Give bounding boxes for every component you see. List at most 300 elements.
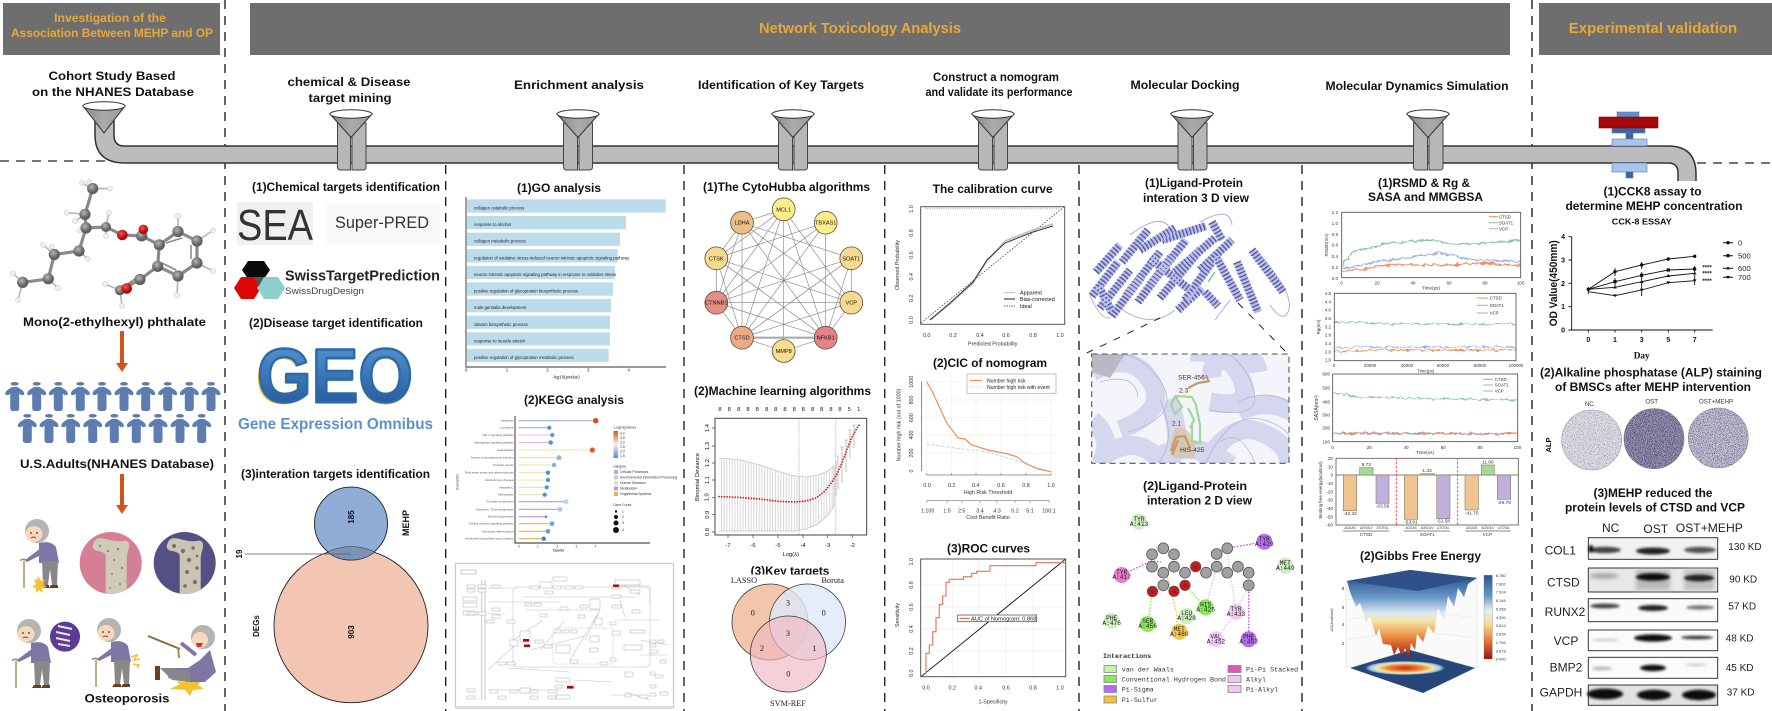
chart: MMGBSA binding free energy bars: ΔGSOLV (1360, 526, 1374, 530)
stage headings: and validate its performance (926, 85, 1073, 99)
chart: MMGBSA binding free energy bars: Binding free energy(kcal/mol) (1318, 461, 1323, 519)
heading: ALP: of BMSCs after MEHP intervention (1555, 380, 1751, 394)
logo: Super-PRED (327, 203, 440, 245)
chart: LASSO deviance plot: 8 (783, 407, 787, 413)
chart: Venn diagram of MEHP and DEGs (235, 487, 428, 703)
chart: calibration curve: 0.2 (949, 333, 957, 339)
chart: CCK-8 line chart: 5 (1666, 337, 1670, 344)
logo: SwissTargetPrediction (234, 261, 440, 299)
chart: SASA: SASA(nm²) (1314, 395, 1320, 421)
chart: clinical impact curve: High Risk Threshold (964, 490, 1012, 496)
chart: western blots (1540, 521, 1762, 705)
panel: molecular dynamics simulation (1314, 176, 1525, 693)
chart: RMSD: CTSD (1499, 214, 1511, 219)
blot: CTSD (1588, 568, 1718, 592)
chart: SASA (1314, 372, 1522, 455)
legend: interactions: Pi-Alkyl (1246, 686, 1278, 694)
chart: Rg: Rg(nm) (1316, 319, 1321, 334)
legend: KEGG: 3.5 (620, 436, 625, 440)
image: docking close-up: 2.1 (1172, 420, 1181, 428)
legend: interactions: Conventional Hydrogen Bond (1122, 676, 1226, 684)
chart: Rg: 2.4 (1325, 341, 1332, 346)
chart: calibration curve: 0.0 (923, 333, 930, 339)
chart: Gibbs free-energy landscape: ΔG(kcal/mol) (1329, 608, 1334, 633)
chart: clinical impact curve: 1.0 (1047, 483, 1055, 489)
chart: clinical impact curve: 800 (909, 396, 915, 404)
chart: GO bars: positive regulation of glycoprotein metabolic process (474, 355, 574, 360)
chart: three-way Venn: 0 (822, 608, 826, 618)
chart: calibration curve: Observed Probability (895, 240, 901, 290)
chart: ROC curve: 0.6 (909, 603, 915, 611)
chart: PPI network: MCL1 (776, 207, 791, 213)
chart: calibration curve: Apparent (1020, 290, 1042, 296)
heading: ALP: (2)Alkaline phosphatase (ALP) staining (1540, 366, 1762, 380)
chart: 2D interaction diagram: A:480 (1170, 631, 1189, 638)
chart: KEGG lollipop: Pyruvate metabolism (486, 500, 514, 504)
chart: CCK-8 line chart (1548, 216, 1751, 362)
panel: cohort study (5, 180, 221, 706)
label: US adults: U.S.Adults(NHANES Database) (20, 457, 214, 471)
chart: LASSO deviance plot: Log(λ) (782, 552, 799, 558)
chart: 2D interaction diagram: A:428 (1177, 615, 1196, 622)
chart: Rg: 60000 (1437, 363, 1450, 368)
chart: KEGG lollipop: Toll-like receptor signaling pathway (469, 522, 514, 526)
chart: Gibbs free-energy landscape: 4 (1342, 622, 1345, 627)
chart: RMSD: 0.0 (1332, 276, 1338, 281)
panel: nomogram validation (895, 182, 1066, 706)
header: network toxicology banner (250, 3, 1510, 55)
chart: SASA: CTSD (1495, 377, 1507, 382)
chart: Gibbs free-energy landscape: 0.000 (1496, 657, 1506, 662)
chart: CCK-8 line chart: 1 (1561, 304, 1565, 311)
header: network toxicology banner: Network Toxicology Analysis (759, 20, 961, 37)
chart: GO bars: collagen metabolic process (474, 239, 526, 244)
chart: MMGBSA binding free energy bars: ΔGGAS (1405, 526, 1417, 530)
chart: SASA: 0 (1331, 445, 1334, 450)
chart: MMGBSA binding free energy bars: 0 (1330, 473, 1333, 478)
chart: RMSD: 60 (1446, 280, 1452, 286)
image: ALP staining wells: OST+MEHP (1699, 398, 1733, 406)
chart: LASSO deviance plot: 1 (857, 407, 860, 413)
chart: western blots: CTSD (1547, 576, 1580, 590)
chart: KEGG lollipop: Lysosome (500, 426, 514, 430)
chart: KEGG lollipop: 3 (576, 544, 578, 548)
chart: MMGBSA binding free energy bars: ΔTOTAL (1376, 526, 1389, 530)
chart: PPI network: NFKB1 (817, 336, 835, 342)
chart: RMSD: SOAT1 (1499, 220, 1514, 225)
chart: western blots: 45 KD (1726, 663, 1753, 674)
chart: RMSD: 1.0 (1332, 221, 1338, 226)
chart: PPI network: TBXAS1 (815, 221, 836, 227)
chart: LASSO deviance plot: 8 (793, 407, 796, 413)
chart: CCK-8 line chart: Day (1634, 352, 1650, 362)
chart: GO bars: vitamin biosynthetic process (474, 322, 528, 327)
chart: clinical impact curve: 0.8 (1022, 483, 1030, 489)
legend: KEGG: 3 (622, 521, 624, 525)
chart: Rg (1316, 291, 1524, 374)
chart: RMSD: 20 (1374, 280, 1380, 286)
heading: RMSD Rg SASA: SASA and MMGBSA (1368, 190, 1483, 204)
heading: CCK8: determine MEHP concentration (1566, 199, 1742, 213)
chart: CCK-8 line chart: OD Value(450mm) (1548, 240, 1560, 326)
chart: RMSD: RSMD(nm) (1324, 233, 1329, 256)
chart: GO bars: neuron intrinsic apoptotic signaling pathway in response to oxidative stress (474, 272, 616, 277)
pipeline pipe (95, 120, 1696, 181)
chart: MMGBSA binding free energy bars: -60 (1326, 523, 1333, 528)
chart: CCK-8 line chart: **** (1702, 271, 1712, 277)
chart: calibration curve: 1.0 (909, 205, 915, 213)
image: ALP staining wells: NC (1585, 401, 1594, 408)
chart: MMGBSA binding free energy bars: ΔGSOLV (1481, 526, 1495, 530)
chart: ROC curve: 0.8 (1029, 686, 1037, 692)
chart: 2D interaction diagram: TYR (1116, 569, 1128, 576)
chart: 2D interaction diagram: PHE (1243, 634, 1255, 640)
logo: SwissTargetPrediction: SwissDrugDesign (285, 286, 364, 297)
chart: RMSD: 100 (1517, 280, 1525, 286)
chart: Rg: 4.4 (1325, 299, 1332, 304)
chart: LASSO deviance plot: 8 (820, 407, 823, 413)
heading: CCK8 (1566, 184, 1742, 213)
icon: osteoporotic bone (154, 532, 216, 598)
chart: GO bars: response to alcohol (474, 222, 511, 227)
chart: RMSD: 40 (1410, 280, 1416, 286)
chart: SASA: 80 (1477, 445, 1483, 450)
chart: three-way Venn: 3 (786, 629, 790, 638)
chart: calibration curve: 0.4 (909, 273, 915, 280)
stage headings: Identification of Key Targets (698, 78, 864, 92)
chart: 2D interaction diagram: TYR (1230, 606, 1242, 613)
chart: calibration curve: Predicted Probability (968, 342, 1018, 348)
chart: calibration curve: 0.6 (909, 251, 915, 259)
heading: ROC: (3)ROC curves (947, 542, 1030, 556)
chart: RMSD: 1.2 (1332, 210, 1338, 215)
valve: experimental clamp (1599, 112, 1658, 178)
logo: SEA: SEA (237, 201, 314, 250)
chart: three-way Venn: 1 (812, 644, 816, 653)
chart: MMGBSA binding free energy bars: 20 (1328, 456, 1333, 461)
legend: KEGG: 2.0 (620, 450, 625, 454)
legend: KEGG: Metabolism (620, 486, 638, 490)
heading: 3D view (1143, 176, 1250, 205)
chart: RMSD: 0.4 (1332, 254, 1338, 259)
chart: LASSO deviance plot: 8 (746, 407, 750, 413)
icon: healthy bone (80, 532, 142, 598)
chart: GO bars: 0 (465, 368, 468, 372)
logo: Super-PRED: Super-PRED (335, 213, 429, 232)
heading: Gibbs: (2)Gibbs Free Energy (1360, 549, 1481, 563)
chart: CCK-8 line chart: 3 (1561, 258, 1565, 264)
chart: RMSD: Time(ps) (1422, 286, 1440, 290)
arrow: to osteoporosis (116, 474, 128, 514)
chart: PPI network: SOAT1 (842, 256, 860, 262)
chart: 2D interaction diagram: O (1172, 589, 1176, 594)
chart: LASSO deviance plot: 1.4 (705, 423, 711, 432)
chart: SASA: Time(ns) (1416, 450, 1434, 455)
chart: SASA: 300 (1322, 413, 1330, 418)
chart: western blots: OST+MEHP (1676, 521, 1743, 535)
chart: PPI network: CTNNB1 (705, 301, 727, 307)
chart: 2D interaction diagram: VAL (1210, 634, 1222, 640)
chart: Rg: 1.6 (1325, 358, 1332, 363)
blot: BMP2 (1588, 657, 1718, 678)
chart: SASA: 500 (1322, 385, 1330, 390)
chart: SASA: VCP (1495, 389, 1504, 394)
chart: clinical impact curve: 1:5 (943, 508, 951, 514)
heading: ALP (1540, 366, 1762, 394)
chart: KEGG lollipop: Apoptosis (501, 419, 514, 423)
heading: chemical targets: (1)Chemical targets identification (252, 180, 440, 194)
chart: Rg: 20000 (1364, 363, 1377, 368)
chart: LASSO deviance plot: 8 (737, 407, 740, 413)
chart: Gibbs free-energy landscape: 7.024 (1496, 590, 1506, 595)
chart: clinical impact curve: 0.4 (972, 483, 979, 489)
chart: KEGG lollipop: Prostate cancer (493, 463, 514, 467)
chart: LASSO deviance plot: 1.2 (705, 459, 711, 467)
chart: ROC curve: 0.0 (922, 686, 930, 692)
chart: KEGG lollipop: Steroid biosynthesis (488, 515, 514, 519)
chart: ROC curve: 0.4 (975, 686, 982, 692)
chart: ROC curve: 0.0 (909, 670, 915, 677)
chart: clinical impact curve: 5:1 (1026, 508, 1034, 514)
chart: RMSD: 0 (1340, 280, 1343, 286)
chart: LASSO deviance plot: -4 (800, 543, 806, 549)
icon: falling elder (148, 625, 216, 696)
chart: three-way Venn (725, 574, 855, 708)
legend: interactions: Pi-Sulfur (1122, 697, 1158, 705)
chart: MMGBSA binding free energy bars: ΔGSOLV (1421, 526, 1434, 530)
chart: KEGG lollipop: Hepatitis C (499, 485, 514, 489)
chart: LASSO deviance plot: 8 (765, 407, 768, 413)
legend: KEGG: 4.0 (620, 432, 625, 436)
header: association study banner (3, 3, 220, 55)
chart: clinical impact curve: 400 (909, 430, 915, 440)
chart: LASSO deviance plot: -7 (725, 543, 731, 549)
chart: GO bars: 3 (587, 368, 590, 372)
chart: CCK-8 line chart: 2 (1561, 281, 1565, 288)
chart: ROC curve: 0.2 (909, 647, 915, 655)
legend: KEGG: 1.5 (620, 454, 625, 458)
heading: 3D view: (1)Ligand-Protein (1145, 176, 1243, 190)
chart: LASSO deviance plot: 5 (848, 407, 851, 413)
chart: 2D interaction diagram: A:453 (1239, 638, 1258, 646)
logo: GEO: GEO (257, 334, 413, 419)
chart: Rg: 3.6 (1325, 316, 1332, 321)
chart: 2D interaction diagram: A:452 (1207, 638, 1226, 646)
chart: western blots: OST (1643, 522, 1669, 536)
legend: interactions: Pi-Pi Stacked (1246, 666, 1298, 674)
chart: LASSO deviance plot: 8 (756, 407, 759, 413)
chart: three-way Venn: LASSO (731, 576, 757, 585)
chart: MMGBSA binding free energy bars: CTSD (1360, 532, 1373, 537)
label: osteoporosis: Osteoporosis (84, 692, 170, 706)
chart: RMSD: 0.8 (1332, 232, 1338, 237)
chart: CCK-8 line chart: **** (1702, 266, 1712, 272)
chart: MMGBSA binding free energy bars: -51.58 (1436, 518, 1450, 524)
chart: calibration curve: 1.0 (1056, 333, 1064, 339)
chart: GO bars: 1 (506, 368, 509, 372)
chart: LASSO deviance plot: 1.3 (705, 442, 711, 450)
legend: KEGG: category (613, 464, 626, 468)
chart: Rg: CTSD (1490, 296, 1502, 301)
chart: clinical impact curve: 2:5 (958, 508, 965, 514)
logo: SwissTargetPrediction: SwissTargetPrediction (285, 268, 440, 284)
chart: KEGG lollipop: Human cytomegalovirus infection (471, 456, 514, 460)
chart: GO bars: positive regulation of glycoprotein biosynthetic process (474, 288, 578, 294)
chart: clinical impact curve: Number high risk with event (987, 385, 1050, 391)
chart: three-way Venn: Boruta (821, 576, 844, 585)
chart: KEGG lollipop: 4 (594, 544, 596, 548)
chart: MMGBSA binding free energy bars: VCP (1483, 532, 1492, 537)
image: ALP staining wells (1544, 398, 1748, 470)
chart: MMGBSA binding free energy bars: ΔGGAS (1344, 526, 1356, 530)
heading: western blot: protein levels of CTSD and VCP (1565, 500, 1745, 514)
legend: interactions: van der Waals (1122, 666, 1174, 674)
chart: PPI network: MMP8 (776, 349, 792, 355)
chart: 2D interaction diagram: A:429 (1255, 541, 1274, 548)
chart: LASSO deviance plot: 8 (811, 407, 814, 413)
chart: KEGG lollipop: HIF-1 signaling pathway (482, 433, 514, 437)
header: experimental validation banner (1539, 3, 1772, 55)
image: ALP staining wells: ALP (1544, 438, 1553, 452)
chart: MMGBSA binding free energy bars: ΔTOTAL (1437, 526, 1450, 530)
chart: 2D interaction diagram: MET (1174, 626, 1185, 633)
legend: KEGG: -Log10(pvalue) (613, 426, 636, 430)
chart: 2D interaction diagram: LEU (1181, 610, 1193, 617)
image: ALP staining wells: OST (1645, 398, 1658, 406)
legend: KEGG: Organismal Systems (620, 492, 652, 496)
chart: Gibbs free-energy landscape: 8.780 (1496, 573, 1506, 578)
header: experimental validation banner: Experimental validation (1569, 20, 1737, 37)
stage headings: Enrichment analysis (514, 78, 644, 92)
heading: calibration: The calibration curve (933, 182, 1053, 196)
chart: western blots: 48 KD (1726, 634, 1753, 644)
chart: CCK-8 line chart: 3 (1640, 337, 1644, 344)
chart: Rg: 2.8 (1325, 333, 1332, 338)
legend: KEGG: Environmental Information Processing (620, 476, 677, 480)
blot: GAPDH (1587, 685, 1718, 705)
chart: PPI network: LDHA (735, 221, 750, 227)
panel: chemical and disease target mining (234, 180, 440, 703)
heading: RMSD Rg SASA (1368, 176, 1483, 204)
chart: LASSO deviance plot: -3 (825, 543, 830, 549)
chart: MMGBSA binding free energy bars: ΔGGAS (1466, 526, 1477, 530)
chart: 2D interaction diagram: O (1151, 589, 1154, 594)
header: association study banner: Investigation of the (54, 11, 166, 25)
heading: machine learning: (2)Machine learning algorithms (694, 384, 871, 398)
chart: KEGG lollipop: Counts (553, 548, 564, 552)
chart: MMGBSA binding free energy bars: 10 (1328, 464, 1333, 469)
chart: 2D interaction diagram: HIS (1200, 602, 1212, 608)
chart: GO bars: collagen catabolic process (474, 206, 524, 210)
chart: LASSO deviance plot: 8 (802, 407, 805, 413)
chart: ROC curve: Sensitivity (895, 603, 901, 627)
chart: ROC curve: 1.0 (1056, 686, 1064, 692)
chart: Rg: SOAT1 (1490, 303, 1504, 308)
chart: western blots: 37 KD (1727, 688, 1754, 699)
label: MEHP name: Mono(2-ethylhexyl) phthalate (23, 315, 206, 329)
chart: KEGG lollipop: Description (456, 474, 460, 490)
chart: ROC curve: 0.8 (909, 581, 915, 589)
chart: GO bars: regulation of oxidative stress-induced neuron intrinsic apoptotic signaling pathway (474, 255, 630, 260)
chart: three-way Venn: 0 (751, 608, 755, 618)
chart: Venn diagram of MEHP and DEGs: 19 (235, 549, 244, 558)
stage headings: chemical & Disease (288, 75, 411, 89)
blot: RUNX2 (1588, 599, 1718, 622)
heading: CCK8: (1)CCK8 assay to (1604, 184, 1702, 198)
chart: KEGG lollipop: Alcoholic liver disease (485, 478, 514, 482)
chart: Rg: 4.0 (1325, 308, 1332, 313)
chart: three-way Venn: 0 (786, 670, 790, 678)
chart: ROC curve: 1.0 (909, 558, 915, 565)
chart: calibration curve: 0.4 (976, 333, 984, 339)
chart: PPI network (705, 198, 863, 362)
chart: SASA: 60 (1441, 445, 1446, 450)
chart: CCK-8 line chart: 0 (1561, 328, 1565, 334)
legend: KEGG (613, 426, 677, 533)
legend: KEGG: 1 (622, 510, 624, 514)
chart: MMGBSA binding free energy bars (1318, 456, 1518, 537)
chart: KEGG pathway map (456, 564, 674, 709)
chart: MMGBSA binding free energy bars: -53.01 (1404, 520, 1418, 526)
chart: 2D interaction diagram: A:413 (1130, 521, 1149, 528)
chart: Gibbs free-energy landscape: 6.146 (1496, 598, 1506, 603)
chart: clinical impact curve (896, 374, 1056, 521)
chart: clinical impact curve: Number high risk (out of 1000) (896, 388, 902, 461)
chart: SASA: 400 (1322, 399, 1330, 404)
stage headings: target mining (308, 91, 392, 105)
chart: ROC curve: 0.2 (949, 686, 956, 692)
panel: enrichment analysis (456, 181, 677, 709)
chart: 2D interaction diagram: A:449 (1276, 565, 1295, 572)
chart: western blots: 57 KD (1728, 602, 1756, 612)
chart: Rg: 100000 (1509, 363, 1524, 368)
chart: western blots: BMP2 (1550, 660, 1583, 674)
chart: MMGBSA binding free energy bars: -29.79 (1497, 500, 1511, 506)
chart: GO bars: response to muscle stretch (474, 338, 526, 343)
chart: Venn diagram of MEHP and DEGs: 903 (347, 625, 356, 639)
chart: LASSO deviance plot: Binomial Deviance (695, 453, 701, 501)
chart: three-way Venn: 2 (760, 644, 764, 653)
legend: KEGG: 3.0 (620, 440, 625, 444)
heading: key targets: (3)Key targets (751, 564, 830, 578)
chart: ROC curve: 0.4 (909, 625, 915, 633)
chart: KEGG lollipop: 1 (537, 544, 539, 548)
chart: CCK-8 line chart: 600 (1738, 264, 1751, 273)
chart: MMGBSA binding free energy bars: -42.32 (1343, 511, 1357, 517)
chart: western blots: RUNX2 (1545, 605, 1586, 619)
chart: LASSO deviance plot: 8 (718, 407, 722, 413)
chart: KEGG lollipop: 2 (556, 544, 558, 548)
heading: CytoHubba: (1)The CytoHubba algorithms (703, 180, 870, 194)
chart: RMSD: 0.6 (1332, 242, 1338, 248)
chart: MMGBSA binding free energy bars: -50 (1326, 514, 1333, 519)
panel: experimental validation (1540, 184, 1762, 705)
legend: KEGG: 4 (622, 528, 624, 532)
chart: three-way Venn: SVM-REF (770, 699, 806, 708)
arrow: to adults (116, 331, 128, 372)
legend: KEGG: Gene Count (613, 503, 631, 507)
chart: LASSO deviance plot (695, 407, 867, 558)
image: protein ribbon (1090, 214, 1290, 320)
chart: LASSO deviance plot: 8 (838, 407, 842, 413)
stage headings: Construct a nomogram (933, 70, 1059, 84)
chart: clinical impact curve: 3:4 (976, 508, 984, 514)
legend: interactions (1103, 653, 1298, 705)
chart: RMSD: 80 (1482, 280, 1488, 286)
chart: Gibbs free-energy landscape: 2.634 (1496, 632, 1506, 637)
chart: SASA: 20 (1367, 445, 1372, 450)
chart: CCK-8 line chart: CCK-8 ESSAY (1612, 216, 1672, 226)
